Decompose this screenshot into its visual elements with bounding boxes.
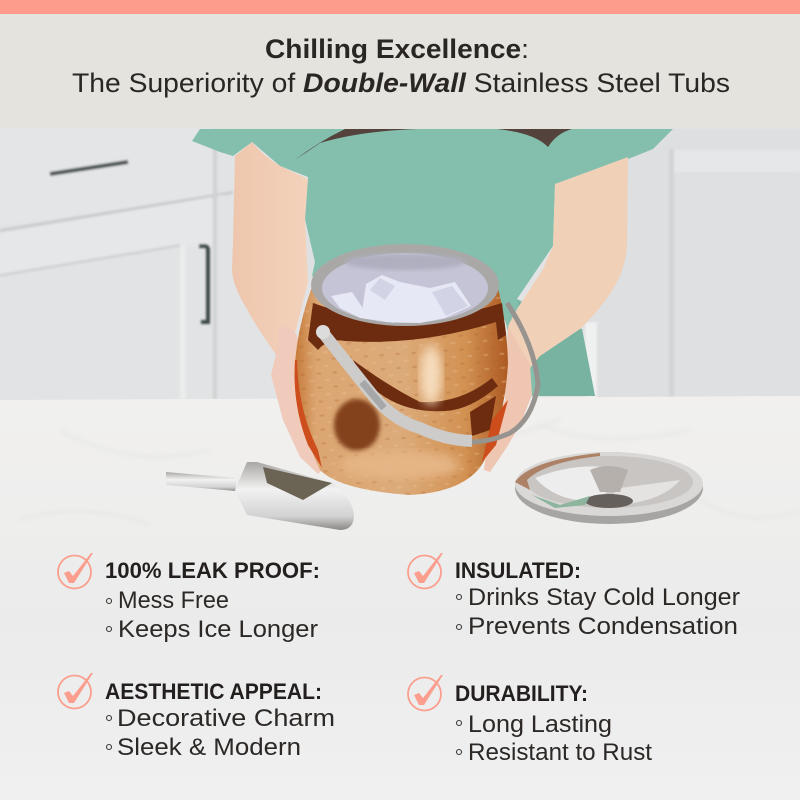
bucket interior xyxy=(322,253,488,323)
bucket body xyxy=(295,287,508,495)
feature: insulated xyxy=(408,553,740,640)
dark reflections xyxy=(308,303,506,436)
hair xyxy=(295,129,572,160)
rim xyxy=(311,244,499,326)
left arm xyxy=(232,142,308,356)
icon: check mark xyxy=(58,673,93,708)
list xyxy=(456,711,652,766)
heading: 100% LEAK PROOF: xyxy=(105,558,320,583)
title panel xyxy=(0,14,800,129)
feature: 100% leak proof xyxy=(58,553,320,643)
photo: steel scoop xyxy=(166,462,354,530)
hands xyxy=(271,326,322,474)
ice cubes xyxy=(331,275,471,323)
list: Sleek & Modern xyxy=(117,734,301,761)
list: Drinks Stay Cold Longer xyxy=(468,584,740,611)
handle xyxy=(470,303,538,442)
list: Resistant to Rust xyxy=(468,739,652,766)
photo: woman in green dress xyxy=(192,129,673,474)
photo: kitchen background xyxy=(0,129,800,401)
list: Mess Free xyxy=(118,587,229,614)
top accent bar xyxy=(0,0,800,14)
heading: INSULATED: xyxy=(455,558,581,583)
heading: DURABILITY: xyxy=(455,681,588,706)
photo: copper ice bucket xyxy=(295,244,538,495)
list xyxy=(106,705,335,761)
list xyxy=(106,587,318,643)
icon: check mark xyxy=(408,553,443,588)
feature: aesthetic appeal xyxy=(58,673,335,761)
right arm xyxy=(508,157,628,368)
feature: durability xyxy=(408,675,652,766)
list: Prevents Condensation xyxy=(468,613,738,640)
heading: AESTHETIC APPEAL: xyxy=(105,679,322,704)
icon: check mark xyxy=(408,675,443,710)
list: Long Lasting xyxy=(468,711,612,738)
list: Keeps Ice Longer xyxy=(118,616,318,643)
list xyxy=(456,584,740,640)
title line two: The Superiority of Double-Wall Stainless Steel Tubs xyxy=(72,68,730,98)
title line one: Chilling Excellence : xyxy=(265,34,529,64)
icon: check mark xyxy=(58,553,93,588)
photo: marble counter xyxy=(0,396,800,800)
dress xyxy=(192,129,673,396)
list: Decorative Charm xyxy=(117,705,335,732)
photo: steel lid xyxy=(515,452,703,524)
